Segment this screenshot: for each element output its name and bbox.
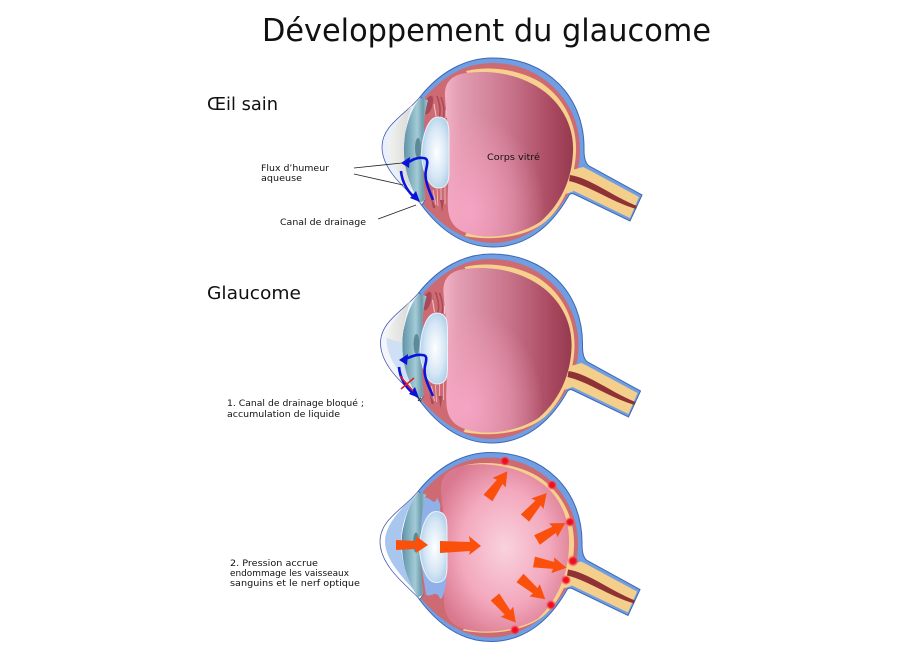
pressure points (500, 456, 578, 635)
pressure arrows (396, 467, 569, 628)
label: corps vitre: Corps vitré (487, 152, 540, 163)
title: Développement du glaucome (262, 13, 711, 49)
red cross: blockage (400, 376, 414, 391)
blue arrows: aqueous flow (401, 157, 433, 202)
label: step 2 line 3: sanguins et le nerf optique (230, 579, 360, 589)
label: step 1 line 2: accumulation de liquide (227, 410, 340, 420)
leader lines (354, 163, 416, 219)
label: canal de drainage: Canal de drainage (280, 218, 366, 228)
anterior chamber blue (418, 498, 447, 599)
healthy eye diagram (382, 58, 642, 247)
blockage specks (418, 397, 421, 402)
vitreous swollen (441, 464, 569, 632)
glaucoma eye: raised pressure (380, 452, 640, 642)
heading: healthy eye: Œil sain (207, 94, 278, 115)
label: step 2 line 2: endommage les vaisseaux (230, 569, 350, 579)
glaucoma eye: blocked drain (380, 254, 640, 443)
label: aqueuse: aqueuse (261, 174, 302, 184)
blue arrows: blocked flow (399, 354, 433, 398)
label: step 1: 1. Canal de drainage bloqué ; (227, 398, 364, 409)
cornea (380, 492, 423, 600)
label: flux d'humeur aqueuse: Flux d’humeur (261, 164, 329, 174)
cornea (380, 293, 424, 401)
heading: glaucoma: Glaucome (207, 283, 301, 304)
cornea (382, 97, 425, 205)
label: step 2: 2. Pression accrue (230, 559, 318, 569)
